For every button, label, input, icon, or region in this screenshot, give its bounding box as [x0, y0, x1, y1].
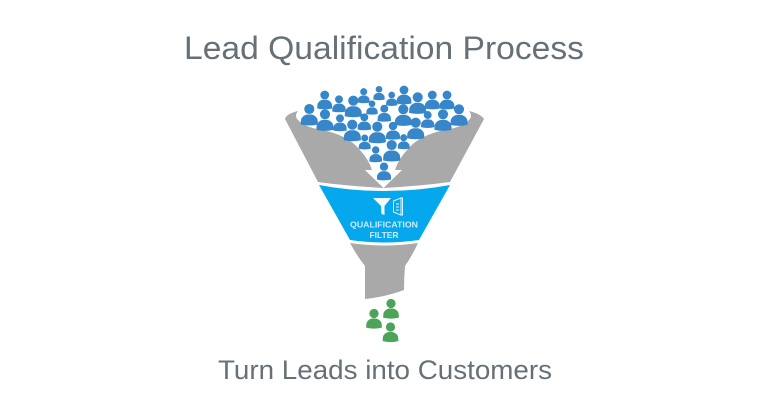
title: Lead Qualification Process: [184, 30, 584, 66]
bottom caption: Turn Leads into Customers: [218, 355, 552, 385]
blue leads crowd: [301, 86, 468, 180]
green customers: [366, 299, 399, 342]
funnel bottom: gray spout: [350, 243, 418, 299]
filter label: QUALIFICATION: [350, 220, 418, 230]
icon: filter: [373, 198, 391, 215]
funnel middle: blue qualification filter: FILTER: [370, 230, 398, 240]
icon: door: [394, 198, 402, 215]
funnel top: gray: [285, 111, 484, 188]
funnel middle: blue qualification filter: [319, 185, 450, 242]
